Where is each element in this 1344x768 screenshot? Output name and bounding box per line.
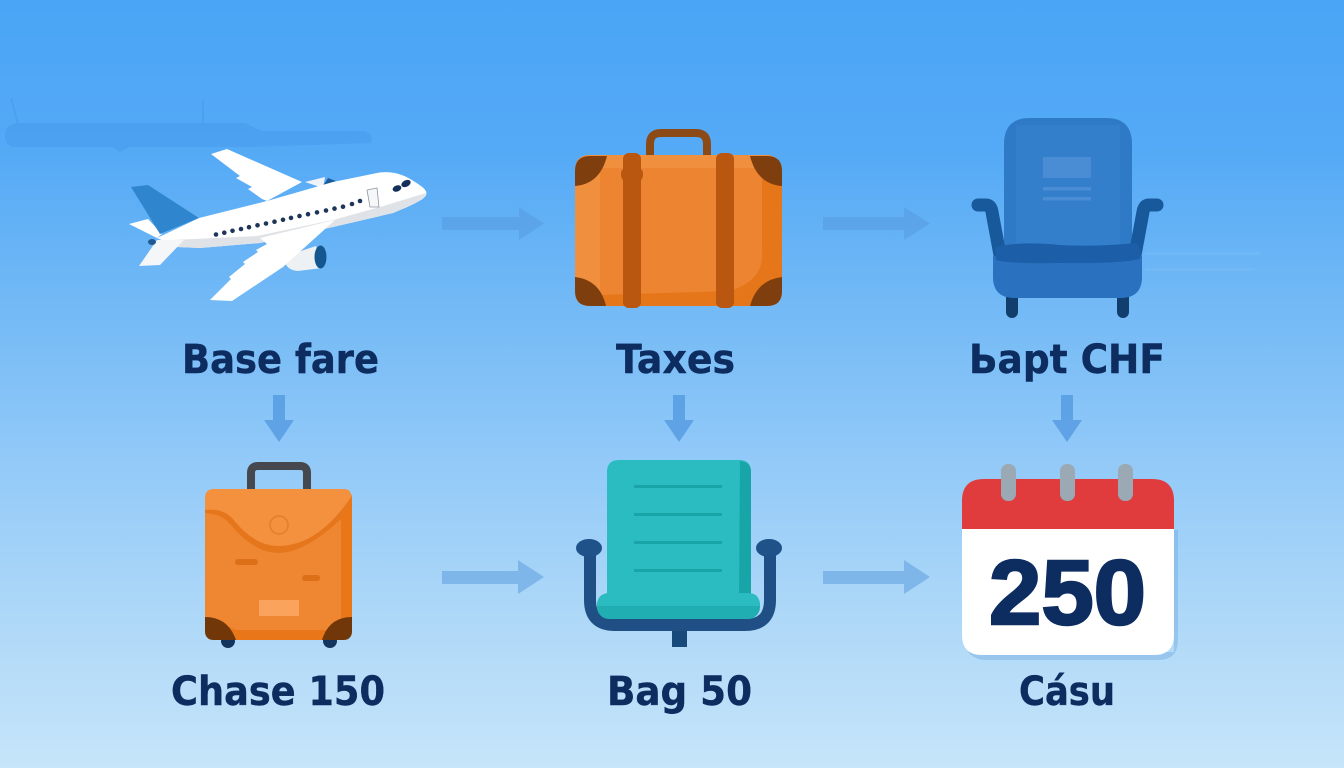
- button: [270, 516, 288, 534]
- cushion: [995, 243, 1141, 263]
- arrow: suitcase to seat: [823, 207, 930, 240]
- arm caps: [576, 539, 602, 557]
- shadow: [968, 530, 1178, 660]
- label: Cásu: Cásu: [1019, 669, 1115, 715]
- icon: blue seat: [978, 118, 1157, 318]
- cockpit windows: [392, 184, 402, 193]
- icon: orange suitcase: [575, 133, 782, 308]
- stem: [672, 625, 687, 647]
- red header: [962, 479, 1174, 529]
- wheels: [221, 634, 235, 648]
- backrest shade: [739, 461, 751, 595]
- left highlight: [575, 155, 770, 306]
- faint background airplane: [5, 98, 372, 152]
- calendar number: 250: [989, 542, 1146, 644]
- label: Ьapt CHF: Ьapt CHF: [969, 337, 1165, 383]
- right and bottom shade: [600, 168, 782, 306]
- arrow: down 2: [664, 395, 694, 442]
- icon: airplane: [129, 149, 426, 301]
- arrow: carry-on to chair: [442, 560, 544, 594]
- label: Bag 50: Bag 50: [607, 669, 752, 715]
- panel on backrest: [1043, 157, 1091, 178]
- icon: orange carry-on bag: [205, 466, 352, 648]
- lower wing: [210, 220, 335, 301]
- corners: [205, 617, 236, 640]
- cushion: [597, 593, 760, 619]
- arrow: down 3: [1052, 395, 1082, 442]
- tail stabilizer lower: [139, 240, 184, 266]
- faint background streaks: [1145, 252, 1260, 271]
- seat base: [993, 256, 1142, 298]
- page: [962, 525, 1174, 655]
- windows: [214, 199, 362, 237]
- label: Chase 150: Chase 150: [171, 669, 385, 715]
- backrest: [1004, 118, 1132, 250]
- handle: [251, 466, 307, 490]
- label: Taxes: Taxes: [616, 337, 735, 383]
- corners: [575, 156, 607, 186]
- backrest: [607, 460, 751, 600]
- flap: [205, 489, 351, 546]
- arrow: chair to calendar: [823, 560, 930, 594]
- stitches: [235, 559, 258, 565]
- arrow: airplane to suitcase: [442, 207, 544, 240]
- body: [575, 155, 782, 306]
- buckle: [621, 167, 643, 182]
- tail stabilizer upper: [129, 219, 162, 238]
- far engine: [305, 177, 325, 188]
- rings: [1001, 464, 1016, 501]
- tail fin: [131, 185, 199, 234]
- tag: [259, 600, 299, 616]
- legs: [1006, 290, 1018, 318]
- handle: [650, 133, 707, 157]
- body: [205, 489, 352, 640]
- straps: [623, 153, 641, 308]
- door: [367, 188, 379, 207]
- fuselage belly shade: [172, 193, 426, 248]
- engine: [285, 246, 322, 271]
- arm frame: [590, 552, 770, 625]
- label: Base fare: Base fare: [182, 337, 379, 383]
- icon: teal chair: [576, 460, 782, 647]
- upper wing: [211, 149, 302, 201]
- icon: calendar: [962, 464, 1178, 660]
- armrests: [978, 205, 1157, 255]
- flap shadow: [205, 505, 342, 553]
- arrow: down 1: [264, 395, 294, 442]
- fuselage: [157, 172, 426, 248]
- backrest lines: [634, 485, 722, 572]
